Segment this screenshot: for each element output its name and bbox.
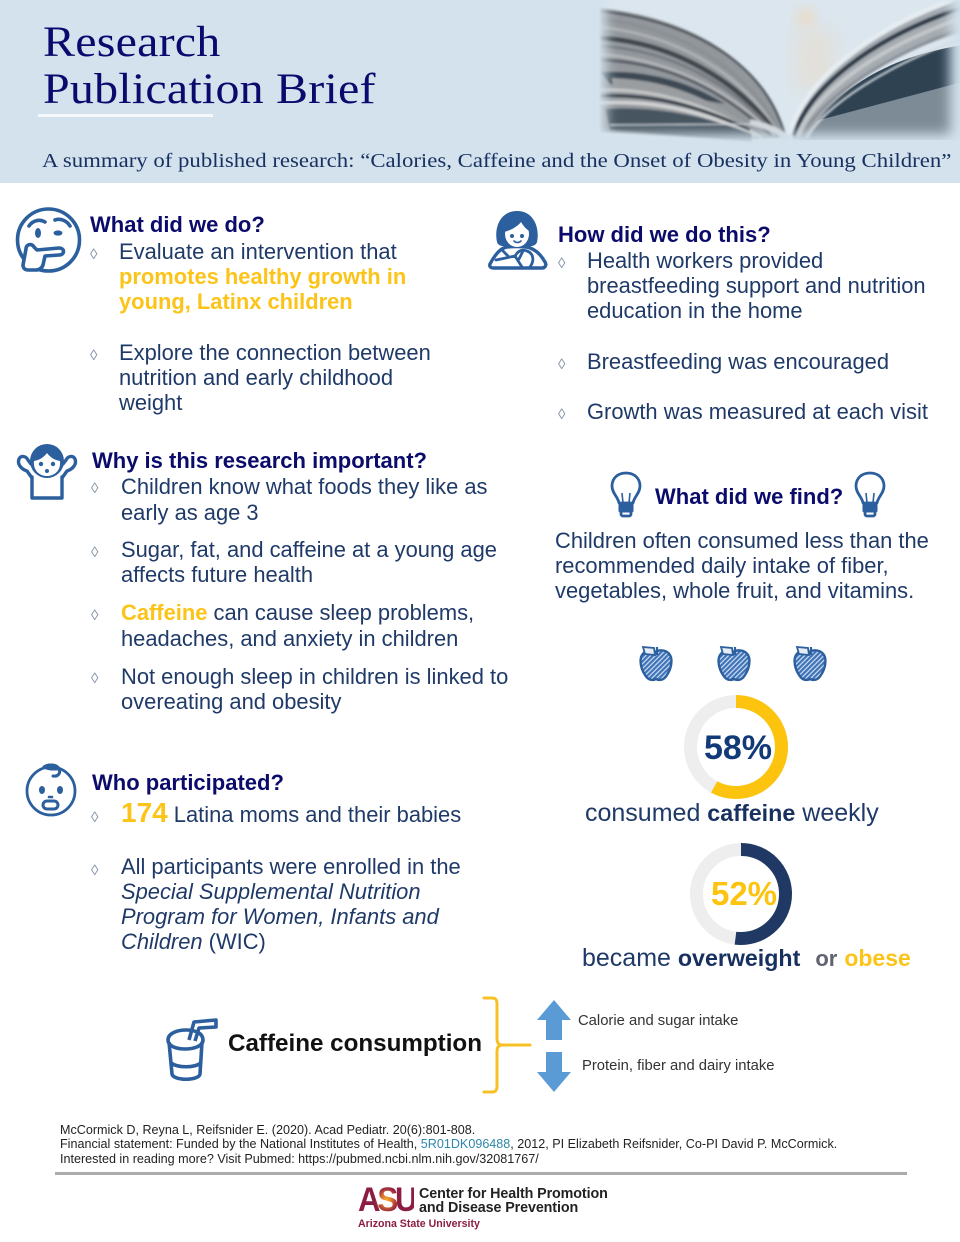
bullet text: Explore the connection between — [119, 340, 431, 365]
caption: consumed caffeine weekly: consumed caffeine weekly — [585, 799, 879, 827]
bullet text: Not enough sleep in children is linked to — [121, 664, 508, 689]
findings text: Children often consumed less than the — [555, 528, 929, 553]
heading: What did we do? — [90, 212, 265, 237]
bullet text: Children know what foods they like as — [121, 474, 488, 499]
bullet: ◊ — [91, 862, 98, 879]
arrow: up — [537, 1000, 571, 1040]
citation text: McCormick D, Reyna L, Reifsnider E. (2020). Acad Pediatr. 20(6):801-808. — [60, 1123, 475, 1137]
bullet text — [119, 340, 431, 415]
arrow: down — [537, 1052, 571, 1092]
logo: ASU center — [358, 1181, 608, 1230]
down label: Protein, fiber and dairy intake — [582, 1058, 774, 1074]
heading: How did we do this? — [558, 222, 771, 247]
bullet: ◊ — [558, 406, 565, 423]
bullet: ◊ — [91, 544, 98, 561]
panel: caffeine consumption effects — [166, 996, 774, 1094]
bullet text: affects future health — [121, 562, 313, 587]
icon: shrugging child — [16, 444, 78, 500]
bullet text: Special Supplemental Nutrition — [121, 879, 421, 904]
caption: became overweight or obese: became overweight or obese — [582, 944, 911, 972]
bullet text: young, Latinx children — [119, 289, 353, 314]
logo mark: ASU — [358, 1181, 414, 1219]
bullet: ◊ — [91, 809, 98, 826]
title: Research — [43, 19, 220, 66]
bullet text: headaches, and anxiety in children — [121, 626, 458, 651]
bullet text: Children (WIC) — [121, 929, 266, 954]
bullet text: Sugar, fat, and caffeine at a young age — [121, 537, 497, 562]
bullet text: weight — [119, 390, 182, 415]
icons: three hatched apples — [639, 646, 827, 682]
chart: 52% overweight ring — [690, 843, 792, 945]
icon: apple 3 — [795, 647, 825, 680]
bullet text: Health workers provided — [587, 248, 823, 273]
up label: Calorie and sugar intake — [578, 1013, 738, 1029]
citation text — [60, 1123, 837, 1166]
panel: what did we find — [555, 472, 929, 603]
bullet text: overeating and obesity — [121, 689, 341, 714]
bullet text: Caffeine can cause sleep problems, — [121, 600, 474, 625]
icon: baby face — [26, 764, 76, 816]
subtitle: A summary of published research: “Calories, Caffeine and the Onset of Obesity in Young Children” — [42, 150, 951, 172]
bullet: ◊ — [91, 670, 98, 687]
bullet text — [121, 600, 474, 651]
label: Caffeine consumption — [228, 1030, 482, 1057]
bullet: ◊ — [90, 246, 97, 263]
citation text: Interested in reading more? Visit Pubmed: https://pubmed.ncbi.nlm.nih.gov/32081767/ — [60, 1152, 539, 1166]
left pages — [600, 0, 960, 142]
findings text: recommended daily intake of fiber, — [555, 553, 889, 578]
heading: Who participated? — [92, 770, 284, 795]
bullet text: nutrition and early childhood — [119, 365, 393, 390]
bullet text: Evaluate an intervention that — [119, 239, 397, 264]
bullet text: All participants were enrolled in the — [121, 854, 461, 879]
bullet text: 174 Latina moms and their babies — [121, 797, 461, 828]
icon: cup with straw — [166, 1018, 218, 1081]
icon: light bulb left — [610, 472, 642, 518]
university name: Arizona State University — [358, 1218, 480, 1230]
chart: 58% caffeine ring — [684, 695, 788, 799]
bullet: ◊ — [558, 255, 565, 272]
bullet text — [121, 537, 497, 587]
bullet text: education in the home — [587, 298, 803, 323]
center name — [419, 1186, 608, 1216]
panel: why is this research important — [16, 444, 508, 714]
bullet text — [121, 474, 488, 525]
center name: and Disease Prevention — [419, 1200, 578, 1216]
bullet text: Program for Women, Infants and — [121, 904, 439, 929]
findings text — [555, 528, 929, 603]
ring value: 52% — [711, 875, 777, 912]
icon: light bulb right — [854, 472, 886, 518]
icon: apple 2 — [719, 647, 749, 680]
bullet text — [119, 239, 406, 314]
citation text: Financial statement: Funded by the National Institutes of Health, 5R01DK096488, 2012, PI Elizabeth Reifsnider, Co-PI David P. McCormick. — [60, 1137, 837, 1151]
panel: how did we do this — [488, 211, 928, 424]
icon: thinking face — [16, 207, 82, 273]
icon: breastfeeding mother — [488, 211, 548, 270]
bullet: ◊ — [558, 356, 565, 373]
panel: what did we do — [16, 207, 431, 415]
panel: who participated — [26, 764, 461, 954]
title: Publication Brief — [43, 66, 376, 113]
bracket — [482, 996, 532, 1094]
bullet text — [587, 248, 926, 323]
title — [43, 19, 376, 113]
dark lower right — [817, 46, 960, 120]
panel: header banner — [0, 0, 960, 183]
findings text: vegetables, whole fruit, and vitamins. — [555, 578, 914, 603]
bullet text — [121, 664, 508, 714]
icon: apple 1 — [641, 647, 671, 680]
right pages — [792, 0, 960, 140]
center name: Center for Health Promotion — [419, 1186, 608, 1202]
ring value: 58% — [704, 729, 772, 767]
bullet text: promotes healthy growth in — [119, 264, 406, 289]
book photo — [600, 0, 960, 142]
bullet text: early as age 3 — [121, 500, 259, 525]
heading: What did we find? — [655, 484, 843, 509]
bullet: ◊ — [91, 607, 98, 624]
bullet text — [121, 854, 461, 954]
heading: Why is this research important? — [92, 448, 427, 473]
bullet text: Growth was measured at each visit — [587, 399, 928, 424]
bullet: ◊ — [90, 347, 97, 364]
bullet: ◊ — [91, 480, 98, 497]
bullet text: Breastfeeding was encouraged — [587, 349, 889, 374]
title underline — [38, 114, 213, 117]
bullet text: breastfeeding support and nutrition — [587, 273, 926, 298]
